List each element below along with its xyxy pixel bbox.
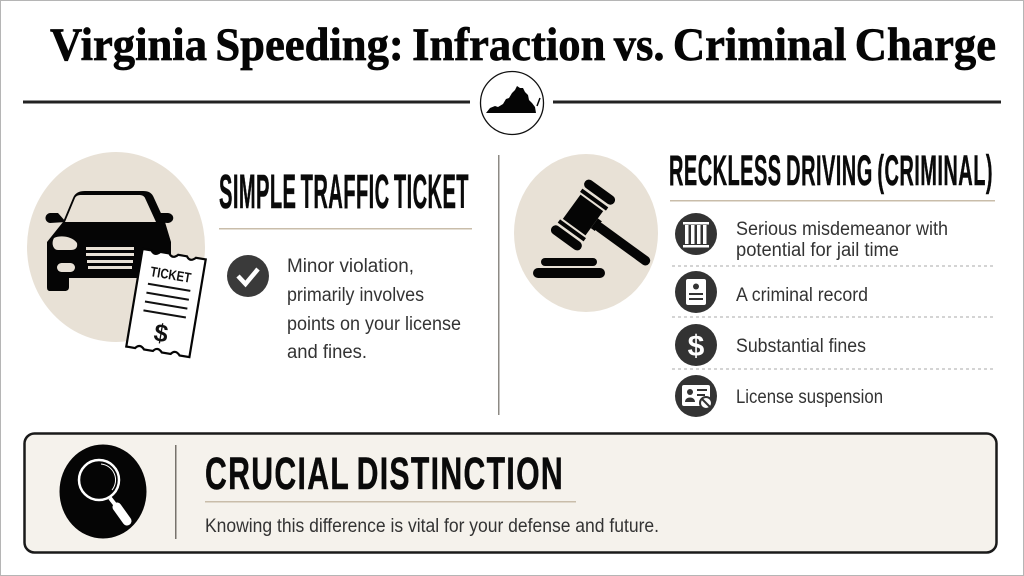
vertical divider: [498, 155, 500, 415]
panel: crucial distinction: [24, 434, 996, 552]
icon: Virginia state silhouette: [480, 72, 544, 134]
icon: jail bars: [675, 213, 717, 255]
icon: magnifying glass: [60, 444, 146, 538]
car silhouette: [47, 191, 171, 291]
ticket: $: [152, 319, 170, 349]
ticket: TICKET: [149, 263, 193, 286]
icon: dollar: $: [688, 330, 705, 363]
icon: dollar: [675, 324, 717, 366]
panel: reckless driving: [514, 147, 995, 417]
title: Virginia Speeding: Infraction vs. Criminal Charge: [50, 19, 996, 71]
icon: suspended license: [675, 375, 717, 417]
item: fines: [675, 324, 866, 366]
text: distinction description: Knowing this difference is vital for your defense and future.: [205, 516, 659, 537]
text: ticket description: primarily involves: [287, 285, 424, 306]
item: jail time: potential for jail time: [736, 240, 899, 261]
ticket: [126, 249, 206, 357]
panel: simple traffic ticket: [27, 152, 472, 363]
icon: gavel: [514, 154, 669, 312]
item: criminal record: [675, 271, 868, 313]
header rule with Virginia emblem: [23, 72, 1001, 134]
text: ticket description: points on your license: [287, 314, 461, 335]
text: ticket description: [287, 256, 461, 363]
text: ticket description: and fines.: [287, 342, 367, 363]
icon: record document: [675, 271, 717, 313]
heading: crucial distinction: CRUCIAL DISTINCTION: [205, 448, 564, 499]
item: fines: Substantial fines: [736, 336, 866, 357]
text: SIMPLE TRAFFIC TICKET: [219, 166, 469, 219]
item: suspension: License suspension: [736, 387, 883, 408]
item: suspension: [675, 375, 883, 417]
item: criminal record: A criminal record: [736, 285, 868, 306]
item: jail time: Serious misdemeanor with: [736, 219, 948, 240]
item: jail time: [675, 213, 948, 261]
text: ticket description: Minor violation,: [287, 256, 414, 277]
icon: check mark: [227, 255, 269, 297]
icon: car and ticket: [27, 152, 206, 357]
